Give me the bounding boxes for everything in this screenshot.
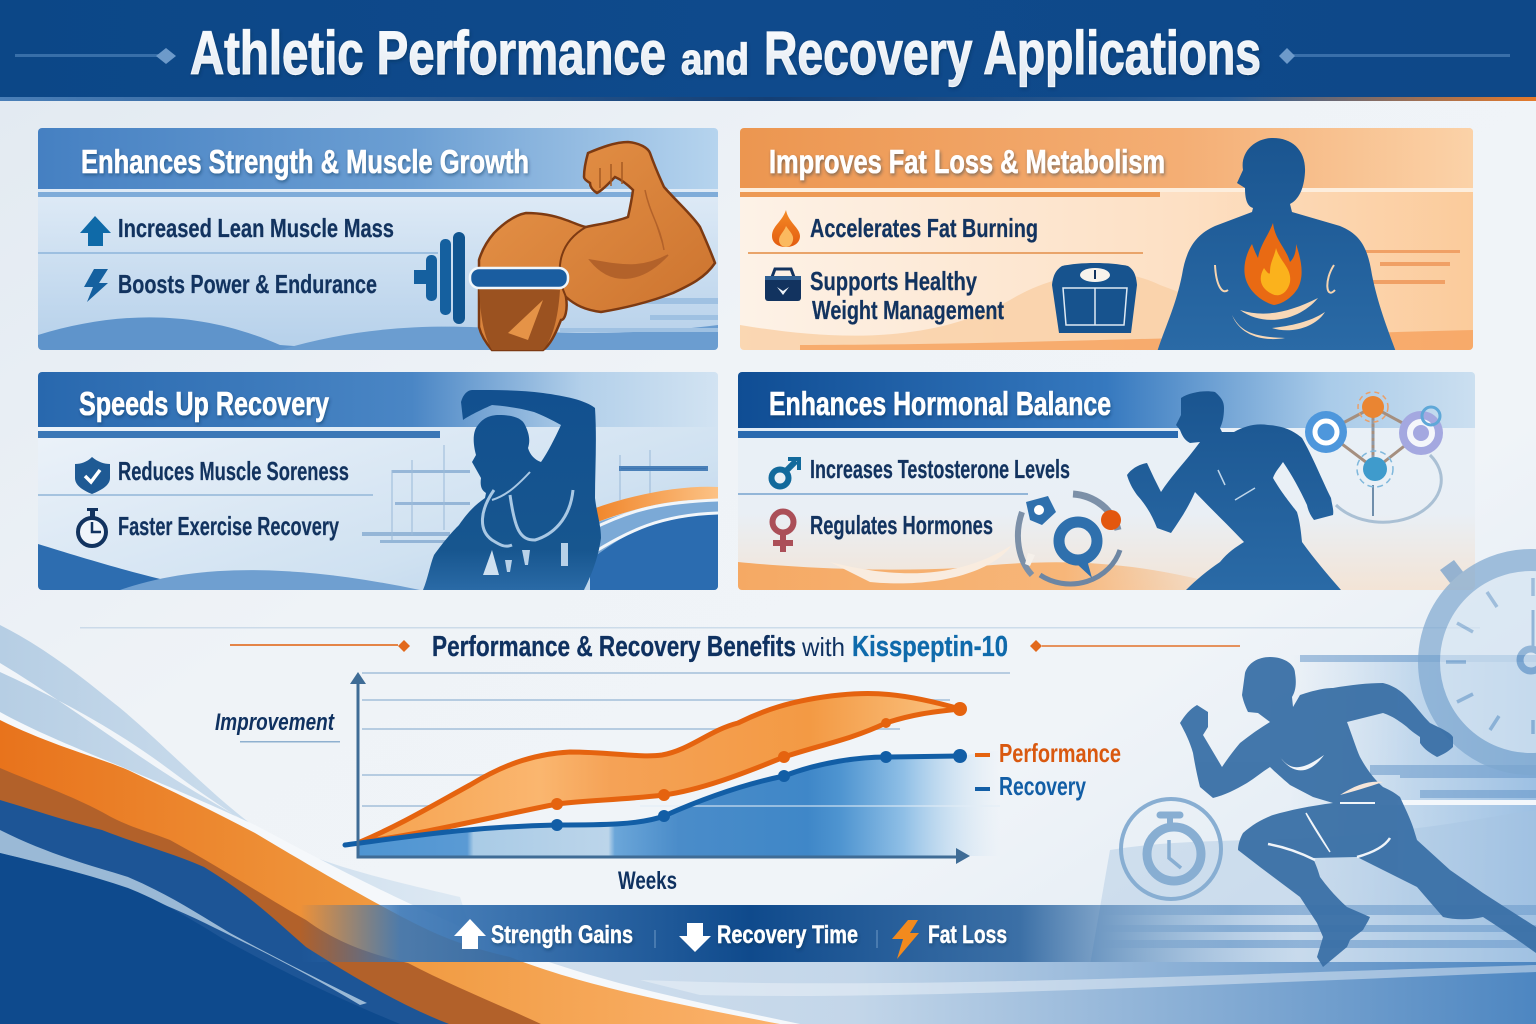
icon: female symbol	[772, 512, 794, 552]
icon: hormone cycle	[1018, 494, 1121, 584]
chart grid	[362, 673, 1010, 806]
icon: up arrow	[80, 216, 111, 246]
icon: bag	[765, 269, 801, 301]
item: power and endurance: Boosts Power & Endurance	[118, 269, 377, 299]
icon: stopwatch	[78, 508, 106, 546]
left ornament	[15, 48, 176, 64]
item: exercise recovery: Faster Exercise Recovery	[118, 511, 339, 541]
recovery area	[358, 750, 1000, 856]
performance upper line	[360, 693, 960, 842]
icon: bathroom scale	[1052, 263, 1137, 333]
chart heading	[230, 631, 1240, 663]
figure: stretching athlete	[423, 390, 601, 590]
data points	[551, 702, 967, 810]
icon: lightning bolt	[84, 269, 108, 302]
item: lean muscle mass: Increased Lean Muscle Mass	[118, 213, 394, 243]
performance area	[360, 693, 960, 842]
heading: Enhances Strength & Muscle Growth	[81, 143, 529, 180]
figure: man with flame	[1157, 138, 1396, 352]
panel header band	[38, 128, 718, 189]
summary: fat loss	[892, 920, 1007, 959]
panel: strength and muscle growth	[38, 128, 718, 350]
sprinting athlete	[1180, 657, 1536, 967]
summary: strength gains: Strength Gains	[491, 921, 633, 949]
summary: recovery time	[679, 921, 858, 952]
item: weight management: Supports Healthy	[810, 266, 977, 296]
heading: Improves Fat Loss & Metabolism	[769, 143, 1165, 180]
item: testosterone: Increases Testosterone Levels	[810, 454, 1070, 484]
panel header band	[738, 372, 1475, 428]
chart heading: Kisspeptin-10	[852, 631, 1008, 663]
summary: recovery time: Recovery Time	[717, 921, 858, 949]
x axis label: Weeks	[618, 867, 677, 895]
icon: body flame	[1244, 223, 1302, 305]
item: weight management: Weight Management	[812, 295, 1004, 325]
large stopwatch watermark	[1429, 560, 1536, 764]
item: fat burning: Accelerates Fat Burning	[810, 213, 1038, 243]
y axis label: Improvement	[215, 709, 335, 736]
legend: Recovery	[999, 771, 1086, 801]
panel header band	[740, 128, 1473, 189]
summary bar	[300, 905, 1300, 962]
item: hormones: Regulates Hormones	[810, 510, 993, 540]
small stopwatch icon	[1121, 799, 1221, 899]
figure: runner	[1127, 391, 1341, 590]
y axis label	[215, 709, 340, 742]
performance lower line	[360, 709, 960, 842]
icon: barbell	[414, 232, 568, 324]
title banner	[0, 0, 1536, 101]
heading: Enhances Hormonal Balance	[769, 385, 1111, 422]
panel: hormonal balance	[738, 372, 1475, 590]
item: muscle soreness: Reduces Muscle Soreness	[118, 456, 349, 486]
chart heading: Performance & Recovery Benefits	[432, 631, 796, 663]
chart heading: with	[801, 632, 845, 662]
summary: strength gains	[454, 919, 633, 949]
icon: flame	[772, 210, 800, 247]
panel: fat loss and metabolism	[740, 128, 1473, 352]
title text	[190, 19, 1261, 87]
icon: hormone network	[1305, 392, 1443, 522]
icon: male symbol	[772, 459, 799, 486]
recovery data points	[551, 749, 967, 831]
decorative swooshes: bottom left	[0, 625, 800, 1024]
heading: Speeds Up Recovery	[79, 385, 329, 422]
panel: speeds up recovery	[38, 372, 718, 590]
right ornament	[1279, 48, 1510, 64]
item: weight management	[810, 266, 1004, 325]
panel header band	[38, 372, 718, 427]
legend	[975, 738, 1121, 801]
legend: Performance	[999, 738, 1121, 768]
summary: fat loss: Fat Loss	[928, 921, 1007, 949]
recovery line	[345, 756, 960, 845]
title text: Recovery Applications	[764, 19, 1261, 87]
icon: flexed arm	[479, 142, 715, 350]
title text: and	[681, 35, 749, 84]
line chart	[215, 672, 1121, 895]
title text: Athletic Performance	[190, 19, 666, 87]
axes	[350, 672, 970, 864]
icon: shield with check	[75, 457, 110, 494]
